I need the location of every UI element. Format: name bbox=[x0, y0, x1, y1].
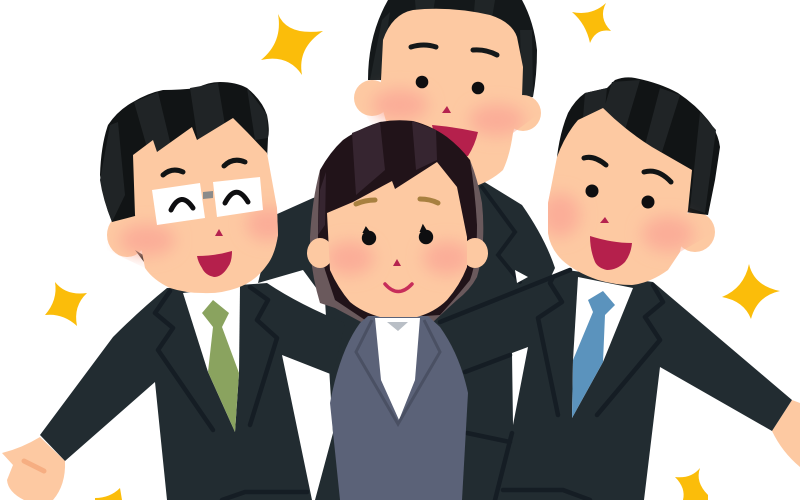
right man suit and arms bbox=[440, 270, 792, 500]
left man bbox=[2, 82, 345, 500]
left man lapels bbox=[155, 287, 307, 500]
gaps between the arms bbox=[512, 270, 528, 425]
woman features bbox=[356, 199, 438, 292]
left man green tie bbox=[202, 300, 239, 432]
woman shirt bbox=[375, 318, 420, 420]
woman ears bbox=[307, 238, 488, 268]
back man features bbox=[411, 45, 497, 160]
left man features bbox=[152, 160, 263, 277]
left man shirt bbox=[183, 286, 240, 432]
left man suit bbox=[40, 283, 345, 500]
back man ears bbox=[354, 80, 541, 131]
woman hair bbox=[310, 160, 483, 323]
left man hair bbox=[100, 82, 269, 270]
woman suit bbox=[330, 316, 468, 500]
back man hair bbox=[368, 0, 537, 100]
right man bbox=[440, 77, 800, 500]
right man face bbox=[548, 108, 692, 285]
back man suit bbox=[258, 170, 555, 500]
left man hand bbox=[2, 437, 65, 500]
right man blue tie bbox=[572, 291, 615, 418]
back man face bbox=[380, 9, 523, 188]
right man lapels bbox=[440, 270, 663, 500]
right man hair bbox=[557, 77, 720, 215]
right man hand bbox=[772, 400, 800, 467]
left man glasses bbox=[152, 177, 263, 225]
back man bbox=[258, 0, 555, 500]
right man features bbox=[584, 157, 671, 270]
left man face bbox=[133, 118, 278, 293]
right man shirt bbox=[572, 277, 633, 418]
right man ear bbox=[675, 212, 715, 252]
woman face bbox=[327, 162, 467, 317]
left man ear bbox=[107, 213, 147, 257]
woman bbox=[307, 120, 488, 500]
woman lapels bbox=[356, 320, 440, 424]
